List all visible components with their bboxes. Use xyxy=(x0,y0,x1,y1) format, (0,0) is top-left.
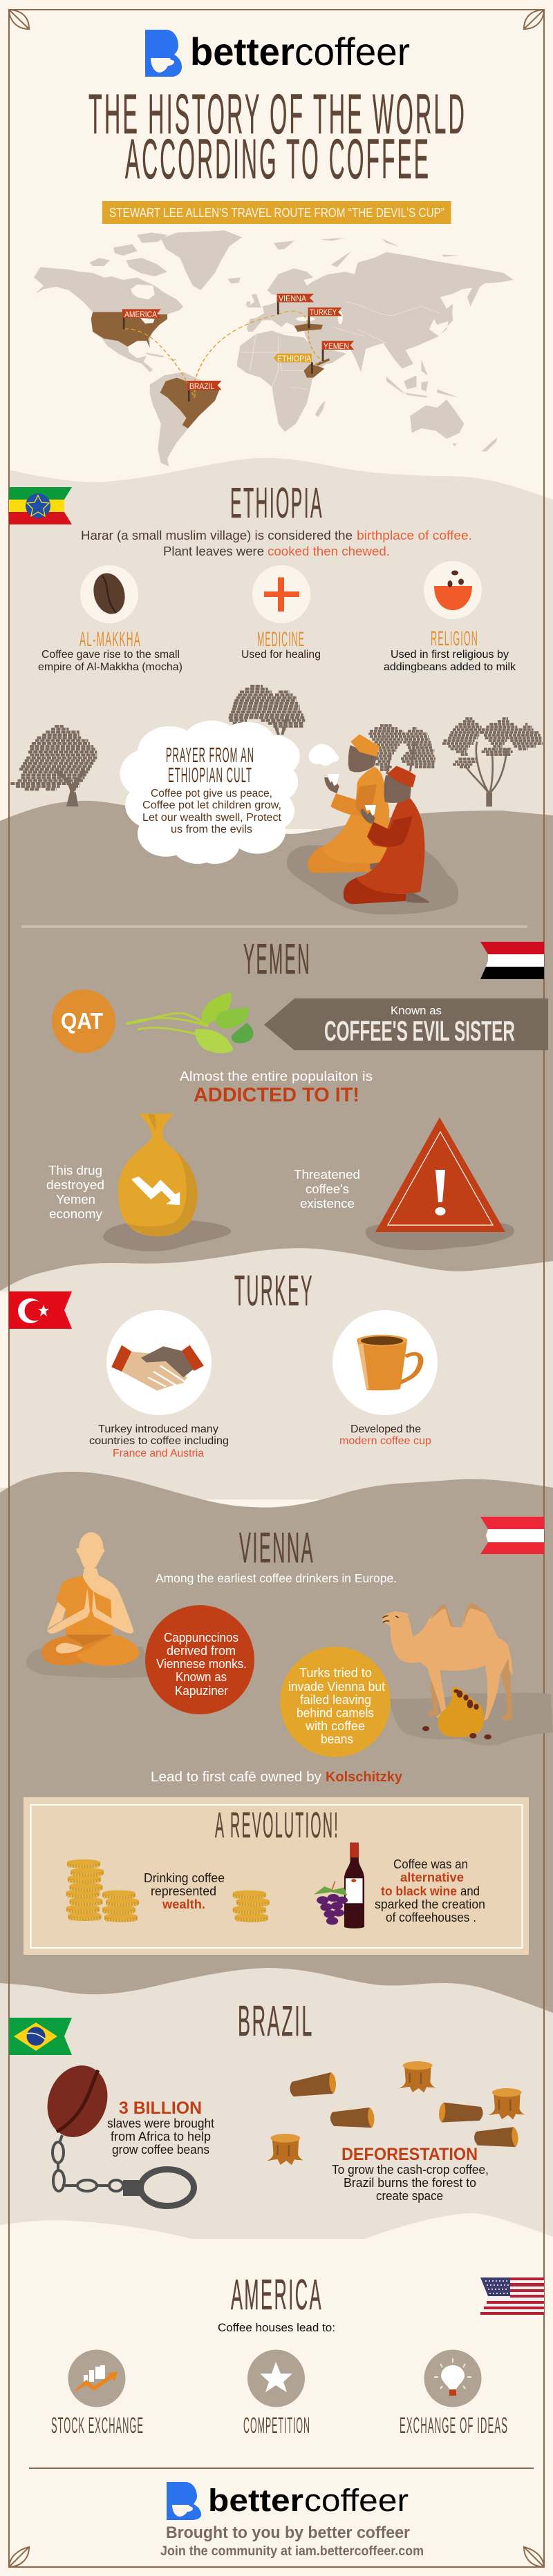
text: deforestation xyxy=(332,2145,489,2203)
panel: A Revolution xyxy=(24,1797,529,1955)
item: stock exchange xyxy=(51,2349,144,2438)
text: wealth: represented xyxy=(151,1884,216,1898)
intro text: birthplace of coffee. xyxy=(357,528,472,542)
panel: A Revolution: A REVOLUTION! xyxy=(215,1806,339,1846)
ribbon: Coffee's evil sister: Known as xyxy=(391,1004,442,1017)
steam xyxy=(309,744,339,766)
icon: blue B with cup xyxy=(167,2482,201,2520)
world map with route xyxy=(34,230,514,466)
column: Al-Makkha: Coffee gave rise to the small xyxy=(41,649,180,661)
thought bubble with prayer: Let our wealth swell, Protect xyxy=(142,812,282,824)
thought bubble with prayer: PRAYER FROM AN xyxy=(166,743,254,767)
callout: Turks xyxy=(280,1647,391,1757)
divider xyxy=(21,925,527,928)
text: destroyed economy: This drug xyxy=(48,1164,102,1177)
wordmark: better xyxy=(208,2483,303,2518)
intro text: Plant leaves were xyxy=(163,544,264,558)
text: modern cup xyxy=(339,1423,431,1447)
band: Ethiopia light section xyxy=(9,458,553,829)
text: intro: Coffee houses lead to: xyxy=(218,2321,335,2334)
panel: America xyxy=(51,2271,544,2438)
map labels: TURKEY xyxy=(310,307,337,317)
icon: blue B with cup xyxy=(145,30,182,77)
callout: Cappuccinos: Known as xyxy=(176,1670,227,1684)
icon: sack with falling arrow xyxy=(103,1114,231,1251)
callout: Turks: beans xyxy=(321,1732,353,1746)
column: Religion xyxy=(384,627,516,673)
column: Al-Makkha xyxy=(38,628,182,673)
callout: addicted: Almost the entire populaiton is xyxy=(180,1070,373,1084)
man 1 xyxy=(308,735,389,873)
footer credits: Brought to you by better coffeer xyxy=(166,2523,410,2542)
band: Brazil light section xyxy=(0,1968,553,2239)
route banner: STEWART LEE ALLEN'S TRAVEL ROUTE FROM “THE DEVIL'S CUP” xyxy=(109,206,444,220)
text: wealth: Drinking coffee xyxy=(144,1871,225,1885)
icon: wine and grapes xyxy=(314,1843,364,1929)
text: deforestation: DEFORESTATION xyxy=(341,2145,478,2164)
column: Medicine: Used for healing xyxy=(241,649,321,661)
intro text: Among the earliest coffee drinkers in Europe. xyxy=(156,1571,397,1585)
text: modern cup: modern coffee cup xyxy=(339,1435,431,1447)
text: alternative to black wine: Coffee was an xyxy=(393,1857,468,1871)
highlighted countries xyxy=(91,312,330,428)
band: Vienna dark section xyxy=(0,1472,553,2018)
flag: USA xyxy=(480,2277,544,2315)
callout: Cappuccinos: Kapuziner xyxy=(175,1684,228,1698)
callout: Turks: with coffee xyxy=(305,1719,365,1733)
map labels: VIENNA xyxy=(279,294,306,303)
wordmark xyxy=(190,30,410,73)
panel: Vienna xyxy=(26,1517,553,1785)
callout: Cappuccinos: Viennese monks. xyxy=(156,1657,247,1671)
continents xyxy=(34,230,514,466)
column: Religion: addingbeans added to milk xyxy=(384,661,516,673)
icon: medical cross xyxy=(252,565,310,623)
callout: Cappuccinos xyxy=(145,1605,254,1714)
intro text: Harar (a small muslim village) is considered the xyxy=(81,528,353,542)
text: first cafe: Kolschitzky xyxy=(326,1770,403,1785)
flag: Ethiopia xyxy=(9,487,72,524)
text: threatened existence: existence xyxy=(300,1197,355,1211)
text: destroyed economy: Yemen xyxy=(56,1193,95,1206)
band: Turkey light section xyxy=(0,1248,553,1499)
text: first cafe xyxy=(151,1770,403,1785)
panel: Brazil: BRAZIL xyxy=(238,1998,314,2045)
text: modern cup: Developed the xyxy=(350,1423,421,1435)
panel: Turkey: TURKEY xyxy=(234,1267,314,1315)
footer credits xyxy=(160,2523,424,2559)
ribbon: Coffee's evil sister xyxy=(264,998,548,1050)
wordmark xyxy=(208,2483,409,2518)
badge: QAT: QAT xyxy=(61,1008,103,1034)
thought bubble with prayer: us from the evils xyxy=(171,824,252,835)
column: Religion: RELIGION xyxy=(431,627,478,650)
illustration: camel with sack xyxy=(382,1603,553,1745)
panel: Yemen: YEMEN xyxy=(243,936,311,983)
text: alternative to black wine: sparked the creation xyxy=(375,1897,485,1911)
callout: Turks: behind camels xyxy=(297,1706,374,1720)
text: destroyed economy: destroyed xyxy=(46,1178,104,1192)
text: alternative to black wine: of coffeehouses . xyxy=(386,1911,476,1924)
text: deforestation: To grow the cash-crop coffee, xyxy=(332,2163,489,2177)
panel: America: COMPETITION xyxy=(243,2413,310,2438)
band: dark hill and Yemen section xyxy=(0,801,553,1299)
thought bubble with prayer: ETHIOPIAN CULT xyxy=(168,763,252,787)
thought bubble with prayer: Coffee pot give us peace, xyxy=(151,788,272,799)
map labels xyxy=(124,294,349,391)
illustration: monk xyxy=(26,1532,152,1678)
icon: logs and stumps xyxy=(267,2061,525,2165)
text: alternative to black wine: to black wine xyxy=(381,1884,457,1898)
text: alternative to black wine xyxy=(375,1857,485,1924)
text: threatened existence: coffee's xyxy=(306,1182,349,1196)
column: Religion: Used in first religious by xyxy=(391,649,509,661)
illustration: bean chained to cuff xyxy=(37,2057,194,2206)
footer logo xyxy=(167,2482,409,2520)
text: Turkey introductions: countries to coffee including xyxy=(89,1435,229,1447)
text: alternative to black wine: and xyxy=(460,1884,480,1898)
text: 3 billion xyxy=(107,2099,214,2157)
callout: Turks: Turks tried to xyxy=(299,1666,372,1680)
text: first cafe: Lead to first cafē owned by xyxy=(151,1770,321,1785)
icon: warning triangle xyxy=(366,1117,514,1250)
column: Al-Makkha: empire of Al-Makkha (mocha) xyxy=(38,661,182,673)
text: deforestation: create space xyxy=(376,2189,443,2203)
text: 3 billion: grow coffee beans xyxy=(112,2143,209,2157)
text: Turkey introductions xyxy=(89,1423,229,1459)
panel: Ethiopia: ETHIOPIA xyxy=(230,480,324,527)
icon: qat plant xyxy=(126,992,253,1053)
flag: Yemen xyxy=(480,942,544,979)
icon: coin stacks xyxy=(66,1859,270,1922)
title xyxy=(88,83,467,191)
panel: Brazil xyxy=(9,1998,525,2206)
flag: Austria xyxy=(480,1517,544,1554)
band: left cream margin xyxy=(0,1291,9,1488)
column: Medicine: MEDICINE xyxy=(257,628,305,651)
panel: America: AMERICA xyxy=(231,2271,323,2319)
callout: Turks: invade Vienna but xyxy=(288,1680,385,1694)
tree 3 xyxy=(368,726,435,774)
map labels: BRAZIL xyxy=(189,381,214,391)
tree 4 xyxy=(442,719,543,806)
map labels: ETHIOPIA xyxy=(277,354,311,363)
wordmark: coffeer xyxy=(304,2483,409,2518)
map labels: AMERICA xyxy=(124,310,157,319)
panel: Turkey xyxy=(9,1267,438,1459)
text: 3 billion: from Africa to help xyxy=(111,2130,211,2143)
flag: Turkey xyxy=(9,1291,72,1329)
text: wealth: wealth. xyxy=(162,1897,205,1911)
text: 3 billion: slaves were brought xyxy=(107,2116,214,2130)
intro text: cooked then chewed. xyxy=(268,544,390,558)
text: Turkey introductions: Turkey introduced many xyxy=(98,1423,218,1435)
tree 1 xyxy=(10,726,97,806)
column: Medicine xyxy=(241,628,321,661)
callout: addicted: ADDICTED TO IT! xyxy=(194,1084,359,1106)
flag: Brazil xyxy=(9,2018,72,2055)
panel: Yemen xyxy=(46,936,548,1251)
map labels: YEMEN xyxy=(324,341,349,351)
text: 3 billion: 3 BILLION xyxy=(119,2099,202,2118)
panel: Vienna: VIENNA xyxy=(239,1524,315,1572)
column: Al-Makkha: AL-MAKKHA xyxy=(79,628,141,651)
thought bubble with prayer xyxy=(120,721,300,864)
panel: Ethiopia xyxy=(9,480,543,914)
text: threatened existence xyxy=(294,1168,360,1211)
text: destroyed economy xyxy=(46,1164,104,1221)
icon: coffee bean xyxy=(80,565,138,623)
text: deforestation: Brazil burns the forest to xyxy=(344,2176,476,2190)
badge: QAT xyxy=(52,989,115,1053)
footer divider xyxy=(29,2468,534,2469)
icon: handshake xyxy=(106,1310,212,1415)
text: threatened existence: Threatened xyxy=(294,1168,360,1182)
item: exchange of ideas xyxy=(400,2349,508,2438)
text: Turkey introductions: France and Austria xyxy=(113,1448,204,1459)
band: America cream section xyxy=(0,2213,553,2576)
callout: addicted xyxy=(180,1070,373,1106)
illustration: praying men with coffee xyxy=(287,735,458,914)
intro text xyxy=(81,528,472,558)
icon: bowl with beans xyxy=(424,561,482,619)
icon: coffee cup xyxy=(332,1310,438,1415)
header logo xyxy=(145,30,410,77)
callout: Turks: failed leaving xyxy=(300,1693,371,1707)
thought bubble with prayer: Coffee pot let children grow, xyxy=(142,799,281,811)
callout: Cappuccinos: derived from xyxy=(167,1644,236,1658)
wordmark: better xyxy=(190,30,294,73)
text: alternative to black wine: alternative xyxy=(400,1871,464,1884)
text: destroyed economy: economy xyxy=(49,1207,102,1221)
item: competition xyxy=(243,2349,310,2438)
man 2 xyxy=(344,766,430,904)
text: wealth xyxy=(144,1871,225,1911)
map flags xyxy=(122,294,354,401)
dashed route xyxy=(124,311,323,397)
tree 2 xyxy=(229,686,305,735)
wordmark: coffeer xyxy=(294,30,410,73)
route banner xyxy=(102,201,451,224)
callout: Cappuccinos: Cappunccinos xyxy=(164,1631,238,1645)
panel: America: STOCK EXCHANGE xyxy=(51,2413,144,2438)
footer credits: Join the community at iam.bettercoffeer.com xyxy=(160,2544,424,2559)
